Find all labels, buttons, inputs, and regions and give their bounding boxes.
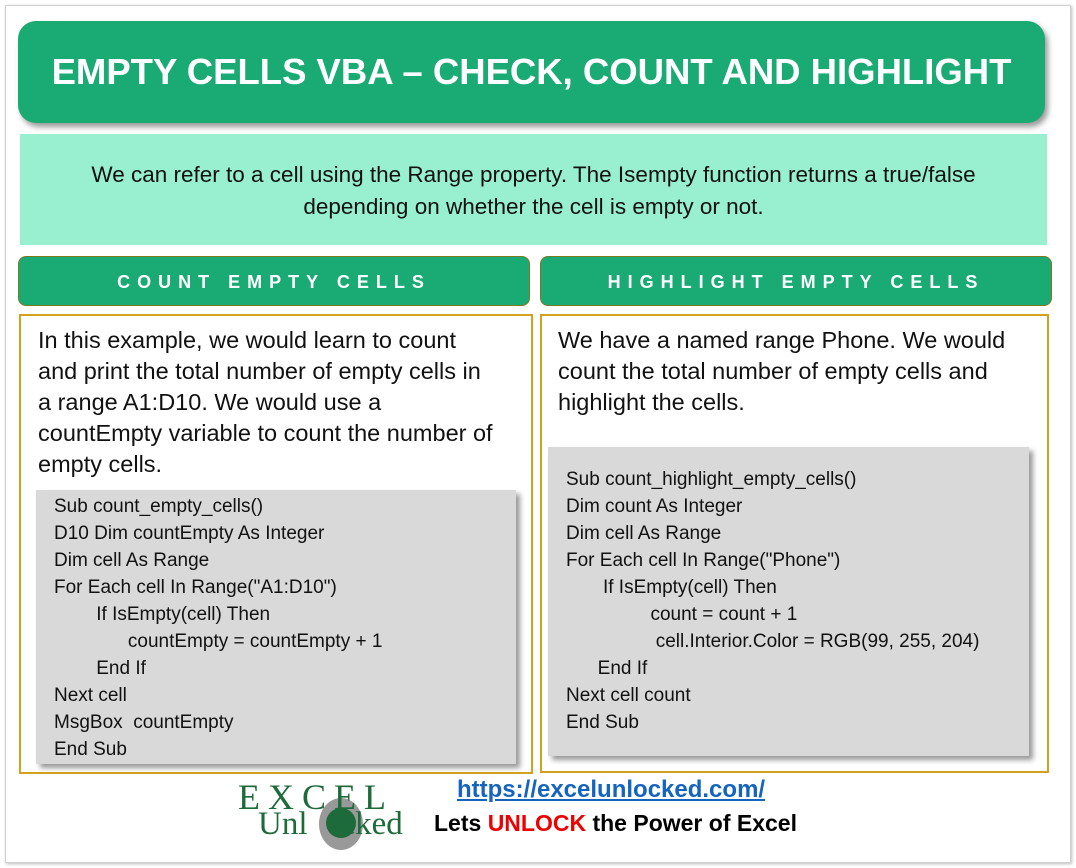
intro text: [20, 134, 1047, 245]
panel: highlight: [540, 314, 1049, 773]
logo: excel unlocked: Unl cked: [258, 806, 403, 842]
heading: highlight empty cells: [540, 256, 1052, 306]
text: count description: empty cells.: [38, 451, 162, 477]
heading: highlight empty cells: HIGHLIGHT EMPTY CELLS: [608, 272, 984, 292]
text: count description: [38, 327, 493, 477]
logo: excel unlocked: EXCEL: [238, 777, 394, 817]
text: highlight description: We have a named range Phone. We would: [558, 327, 1005, 353]
code: count: Sub count_empty_cells() D10 Dim countEmpty As Integer Dim cell As Range For Each cell In Range("A1:D10") If IsEmpty(cell) Then countEmpty = countEmpty + 1 End If Next cell MsgBox countEmpty End Sub: [54, 496, 382, 760]
text: count description: countEmpty variable to count the number of: [38, 420, 493, 446]
panel: count: [19, 314, 533, 774]
intro text: We can refer to a cell using the Range property. The Isempty function returns a true/false: [91, 162, 976, 187]
text: count description: In this example, we would learn to count: [38, 327, 456, 353]
heading: count empty cells: [18, 256, 530, 306]
heading: count empty cells: COUNT EMPTY CELLS: [117, 272, 431, 292]
code: count: [36, 490, 516, 764]
intro text: depending on whether the cell is empty or not.: [303, 194, 764, 219]
text: count description: a range A1:D10. We would use a: [38, 389, 381, 415]
logo: excel unlocked: [238, 777, 403, 850]
title: EMPTY CELLS VBA – CHECK, COUNT AND HIGHLIGHT: [52, 51, 1011, 92]
link: https://excelunlocked.com/: [457, 776, 765, 803]
icon: lock: [319, 798, 363, 850]
text: count description: and print the total number of empty cells in: [38, 358, 481, 384]
text: highlight description: count the total number of empty cells and: [558, 358, 988, 384]
title: [18, 21, 1045, 123]
code: highlight: Sub count_highlight_empty_cells() Dim count As Integer Dim cell As Range For Each cell In Range("Phone") If IsEmpty(cell) Then count = count + 1 cell.Interior.Color = RGB(99, 255, 204) End If Next cell count End Sub: [566, 469, 979, 733]
text: highlight description: [558, 327, 1005, 415]
tagline: Lets UNLOCK the Power of Excel: [434, 810, 797, 836]
text: highlight description: highlight the cells.: [558, 389, 745, 415]
